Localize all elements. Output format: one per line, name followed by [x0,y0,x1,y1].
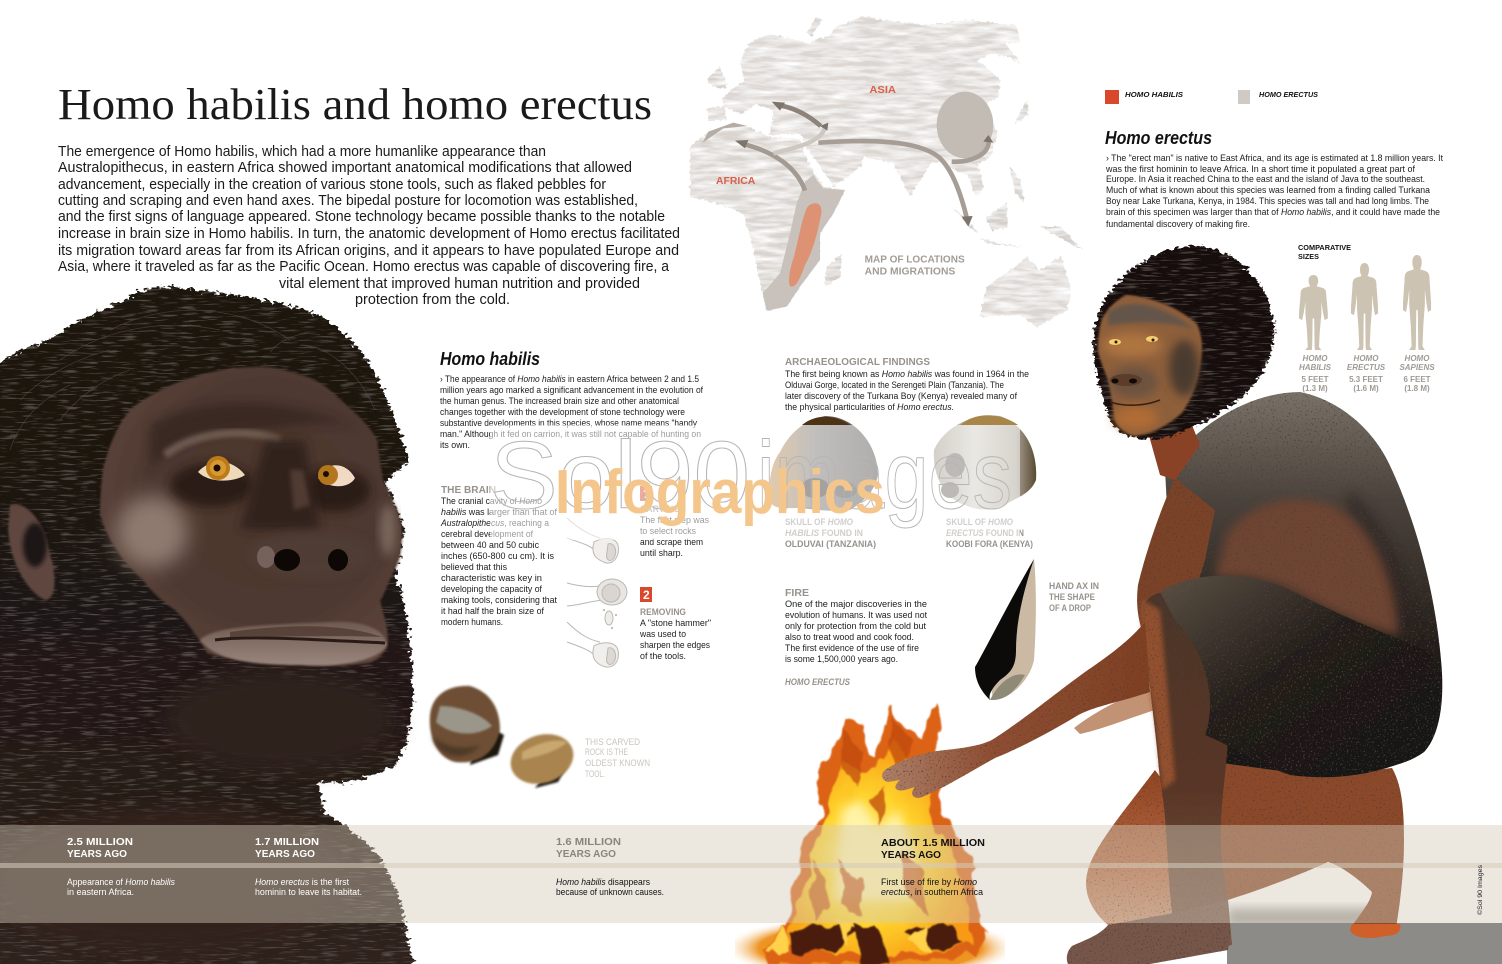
legend swatch: Homo habilis [1105,90,1119,104]
text: Homo erectus description: › The "erect man" is native to East Africa, and its age is estimated at 1.8 million years. It [1106,153,1444,163]
timeline band [0,825,1502,923]
hips dark band [1345,490,1415,640]
watermark veil [490,425,1020,540]
intro paragraph [58,144,680,308]
upper arm [1137,478,1215,640]
text: The brain: Australopithecus, reaching a [440,518,549,528]
timeline entry: 1.7 million years ago: Homo erectus is the first [255,877,350,887]
illustration: fire [735,703,1005,964]
watermark [490,422,1020,540]
chart title [1298,243,1351,261]
ground shadow [1227,908,1502,964]
intro paragraph: vital element that improved human nutrition and provided [279,276,640,292]
beard lighter tone [165,670,395,770]
land: Eurasia [707,17,1022,197]
timeline entry: 1.7 million years ago [255,836,362,897]
face [1098,295,1202,436]
map of locations and migrations [690,17,1083,327]
text: Archaeological findings [785,369,1029,412]
text: Homo habilis description [440,374,704,450]
intro paragraph: increase in brain size in Homo habilis. In turn, the anatomic development of Homo erectus facilitated [58,226,680,242]
heading: Homo habilis: Homo habilis [440,349,540,369]
text: Archaeological findings: later discovery of the Turkana Boy (Kenya) revealed many of [785,391,1018,401]
Homo erectus range: East Asia [937,92,993,158]
text: Fire: The first evidence of the use of fire [785,643,919,653]
land: Africa east shaded range [763,175,845,311]
flame red tongues [808,715,930,925]
timeline entry: 1.6 million years ago: Homo habilis disappears [556,877,651,887]
text: Homo habilis description: million years ago marked a significant advancement in the evolution of [440,385,704,395]
size labels: Homo habilis: HABILIS [1299,363,1332,372]
step 1 text: until sharp. [640,548,683,558]
Homo habilis range: East Africa [789,203,821,287]
inner ear [23,523,47,567]
timeline entry: 2.5 million years ago: in eastern Africa. [67,887,134,897]
cheek dark [1169,340,1199,396]
carved rocks [430,686,580,792]
chest tone [0,810,350,950]
step number 2: 2 [643,588,650,602]
illustration: Homo erectus figure [882,246,1442,964]
forehead shade [150,403,360,470]
forehead [1108,304,1195,330]
text: The brain: cerebral development of [441,529,534,539]
text: The brain: between 40 and 50 cubic [441,540,540,550]
legend label: Homo erectus: HOMO ERECTUS [1259,90,1318,99]
step 1 text: The first step was [640,515,710,525]
fire glow on ground [735,918,1005,964]
step 1: carving [640,486,710,558]
size labels: Homo habilis: 5 FEET [1301,375,1329,384]
timeline entry: about 1.5 million years ago: YEARS AGO [881,849,941,861]
intro paragraph: Asia, where it traveled as far as the Pacific Ocean. Homo erectus was capable of discovering fire, a [58,259,670,275]
text: Homo erectus description: was the first hominin to leave Africa. In a short time it populated a great part of [1105,164,1416,174]
caption: hand ax: OF A DROP [1049,603,1091,613]
caption: skull of Homo habilis [785,517,876,549]
outer flame [763,703,985,964]
heading: Archaeological findings: ARCHAEOLOGICAL FINDINGS [785,357,930,368]
timeline entry: 1.6 million years ago [556,836,664,897]
size labels: Homo habilis: HOMO [1303,354,1328,363]
text: The brain: developing the capacity of [441,584,543,594]
size labels: Homo habilis [1299,354,1332,393]
step 2 text: of the tools. [640,651,686,661]
caption: oldest tool: OLDEST KNOWN [585,758,650,768]
timeline entry: about 1.5 million years ago: ABOUT 1.5 MILLION [881,837,985,849]
text: Homo erectus description: brain of this specimen was larger than that of Homo habilis, and it could have made the [1106,207,1440,217]
intro paragraph: its migration toward areas far from its African origins, and it appears to have populated Europe and [58,243,679,259]
caption: skull of Homo habilis: OLDUVAI (TANZANIA) [785,539,876,549]
label: Homo erectus: HOMO ERECTUS [785,677,850,687]
thigh [1160,576,1439,777]
watermark: images outline: images [757,422,1012,529]
text: Fire: also to treat wood and cook food. [785,632,914,642]
text: The brain: The cranial cavity of Homo [441,496,542,506]
rock: carved core [430,686,504,765]
legend [1105,90,1318,104]
eyes [1109,336,1158,345]
size labels: Homo habilis: (1.3 M) [1302,384,1328,393]
illustration: Homo habilis head [0,287,415,964]
timeline entry: 1.7 million years ago: hominin to leave its habitat. [255,887,362,897]
legend swatch: Homo erectus [1238,90,1250,104]
brow highlight [165,433,280,455]
text: The brain: believed that this [441,562,508,572]
mouth [1110,400,1160,405]
icon: third hand scraping [567,622,618,667]
text: Homo erectus description: fundamental discovery of making fire. [1106,219,1250,229]
land: Australia [979,256,1071,327]
step 2 text: was used to [639,629,686,639]
nose [250,533,374,577]
body with speckled hair [882,392,1442,964]
forearm and hand [882,622,1150,798]
map label: Asia: ASIA [869,85,896,96]
size labels: Homo sapiens: HOMO [1405,354,1430,363]
text: Fire: One of the major discoveries in the [785,599,927,609]
size labels: Homo erectus: ERECTUS [1347,363,1386,372]
text: Homo habilis description: its own. [440,440,470,450]
timeline entry: 1.6 million years ago: YEARS AGO [556,848,616,860]
kneeling thigh [1086,770,1200,955]
left cheek highlight [116,496,188,568]
icon: stone chips [603,609,617,629]
step 1 text: to select rocks [640,526,697,536]
caption: skull of Homo erectus: SKULL OF HOMO [946,517,1013,527]
caption: hand ax [1049,581,1099,613]
burning logs [790,925,965,964]
map caption: MAP OF LOCATIONS [865,255,965,266]
text: Homo habilis description: substantive developments in this species, whose name means "handy [440,418,698,428]
silhouette: Homo erectus [1351,263,1378,350]
caption: skull of Homo habilis: SKULL OF HOMO [785,517,853,527]
size labels: Homo erectus: HOMO [1354,354,1379,363]
caption: skull of Homo erectus [946,517,1033,549]
timeline entry: 2.5 million years ago: YEARS AGO [67,848,127,860]
eye socket right [299,468,371,512]
icon: first hand scraping [567,518,618,563]
silhouette: Homo habilis [1299,275,1328,350]
knee orange side [1141,600,1175,790]
text: Homo habilis description: man." Although it fed on carrion, it was still not capable of hunting on [440,429,701,439]
heading: Homo erectus: Homo erectus [1105,128,1212,148]
text: Homo habilis description: changes together with the development of stone technology were [440,407,685,417]
heading: The brain: THE BRAIN [441,485,496,496]
size labels: Homo erectus [1347,354,1386,393]
text: Homo erectus description: Boy near Lake Turkana, Kenya, in 1984. This species was tall and had long limbs. The [1106,196,1429,206]
step 2 text [639,618,711,661]
step 2 text: A "stone hammer" [640,618,711,628]
comparative sizes chart [1298,243,1435,393]
caption: oldest tool: TOOL. [585,769,605,779]
hair and beard [0,287,415,964]
map caption [865,255,965,278]
map label: Africa: AFRICA [716,176,755,187]
caption: skull of Homo habilis: HABILIS FOUND IN [785,528,863,538]
hand ax [975,559,1036,700]
nose [1110,374,1142,386]
face skin [100,367,402,666]
text: Homo erectus description: Much of what is known about this species was learned from a finding called Turkana [1106,185,1430,195]
intro paragraph: cutting and scraping and even hand axes. The bipedal posture for locomotion was established, [58,193,638,209]
title: Homo habilis and homo erectus [58,80,652,129]
text: Homo habilis description: the human genus. The increased brain size and other anatomical [440,396,679,406]
torso back [1165,392,1442,775]
step 1 text: and scrape them [640,537,703,547]
inner flame [785,740,972,960]
text: Fire: evolution of humans. It was used not [785,610,928,620]
silhouette: Homo sapiens [1403,255,1431,350]
step 2: removing [639,587,711,661]
timeline entry: 2.5 million years ago: Appearance of Homo habilis [67,877,176,887]
far hand [1074,690,1155,734]
text: Homo erectus description: Europe. In Asia it reached China to the east and the island of Java to the southeast. [1106,174,1425,184]
front foot [1067,900,1230,964]
land: islands [706,17,1083,287]
hair highlights [10,310,375,450]
timeline entry: 1.6 million years ago: 1.6 MILLION [556,836,621,848]
step 2 heading: REMOVING [640,607,686,617]
land: North Africa shaded strip [703,123,747,143]
text: The brain: it had half the brain size of [441,606,545,616]
text: The brain: making tools, considering that [441,595,558,605]
copyright: ©Sol 90 Images [1477,865,1484,915]
heading: Fire: FIRE [785,588,809,599]
caption: oldest tool [585,737,650,779]
text: The brain: characteristic was key in [441,573,542,583]
chart title: SIZES [1298,252,1319,261]
text: The brain [440,496,558,627]
icon: second hand with hammerstone [567,579,627,606]
size labels: Homo sapiens: SAPIENS [1399,363,1435,372]
size labels: Homo sapiens: (1.8 M) [1404,384,1430,393]
timeline entry: about 1.5 million years ago: erectus, in southern Africa [881,887,983,897]
timeline entry: 1.7 million years ago: YEARS AGO [255,848,315,860]
step 1 heading: CARVING [640,504,680,514]
step 2 text: sharpen the edges [640,640,711,650]
text: Fire: only for protection from the cold but [785,621,927,631]
shin front leg [1143,593,1232,955]
timeline entry: 1.6 million years ago: because of unknown causes. [556,887,664,897]
size labels: Homo sapiens [1399,354,1435,393]
caption: skull of Homo erectus: ERECTUS FOUND IN [946,528,1024,538]
nose bridge [240,440,320,530]
intro paragraph: Australopithecus, in eastern Africa showed important anatomical modifications that allowed [58,160,632,176]
neck [1148,420,1200,480]
chin [1114,406,1158,430]
text: The brain: habilis was larger than that of [441,507,558,517]
mouth [200,622,387,666]
text: Homo habilis description: › The appearance of Homo habilis in eastern Africa between 2 and 1.5 [440,374,699,384]
timeline entry: 2.5 million years ago: 2.5 MILLION [67,836,133,848]
size labels: Homo erectus: 5.3 FEET [1349,375,1383,384]
intro paragraph: protection from the cold. [355,292,510,308]
timeline entry: 1.7 million years ago: 1.7 MILLION [255,836,319,848]
caption: hand ax: THE SHAPE [1049,592,1095,602]
text: Archaeological findings: The first being known as Homo habilis was found in 1964 in the [785,369,1029,379]
intro paragraph: The emergence of Homo habilis, which had a more humanlike appearance than [58,144,546,160]
watermark: Infographics: Infographics [555,458,885,527]
eye left [198,456,245,481]
rock: pebble [504,726,580,792]
ear [8,504,55,600]
land masses [690,17,1083,327]
skull: Homo erectus [934,415,1036,510]
eye right [318,465,355,486]
timeline entry: about 1.5 million years ago [881,837,985,897]
eye area [1102,333,1162,357]
muzzle [1110,366,1158,398]
text: Fire [785,599,928,664]
text: Archaeological findings: Olduvai Gorge, located in the Serengeti Plain (Tanzania). The [785,380,1004,390]
illustration: hands working stone [567,518,627,667]
legend label: Homo habilis: HOMO HABILIS [1125,90,1183,99]
right cheek highlight [380,504,396,556]
head hair [1093,246,1274,439]
eye socket left [170,463,254,507]
size labels: Homo erectus: (1.6 M) [1353,384,1379,393]
map caption: AND MIGRATIONS [865,267,956,278]
caption: skull of Homo erectus: KOOBI FORA (KENYA) [946,539,1033,549]
text: Archaeological findings: the physical particularities of Homo erectus. [785,402,954,412]
text: Fire: is some 1,500,000 years ago. [785,654,898,664]
migration arrows [743,105,989,220]
intro paragraph: and the first signs of language appeared. Stone technology became possible thanks to the notable [58,209,665,225]
caption: hand ax: HAND AX IN [1049,581,1099,591]
timeline entry: 2.5 million years ago [67,836,176,897]
size labels: Homo sapiens: 6 FEET [1403,375,1431,384]
rear foot [1350,924,1400,938]
text: Homo erectus description [1105,153,1444,229]
land: Africa [690,124,845,311]
intro paragraph: advancement, especially in the creation of various stone tools, such as flaked pebbles for [58,177,606,193]
text: The brain: modern humans. [441,617,503,627]
step number 1: 1 [643,487,650,501]
watermark: Sol90 outline: Sol90 [490,422,750,529]
caption: oldest tool: THIS CARVED [585,737,640,747]
timeline entry: about 1.5 million years ago: First use of fire by Homo [881,877,977,887]
belly [1215,500,1400,635]
flames at the base [765,918,930,958]
skull: Homo habilis [769,416,878,511]
flame core [835,800,920,900]
step 1 text [640,515,710,558]
chart title: COMPARATIVE [1298,243,1351,252]
caption: oldest tool: ROCK IS THE [585,747,628,757]
text: The brain: inches (650-800 cu cm). It is [441,551,555,561]
rear leg [1205,735,1404,935]
